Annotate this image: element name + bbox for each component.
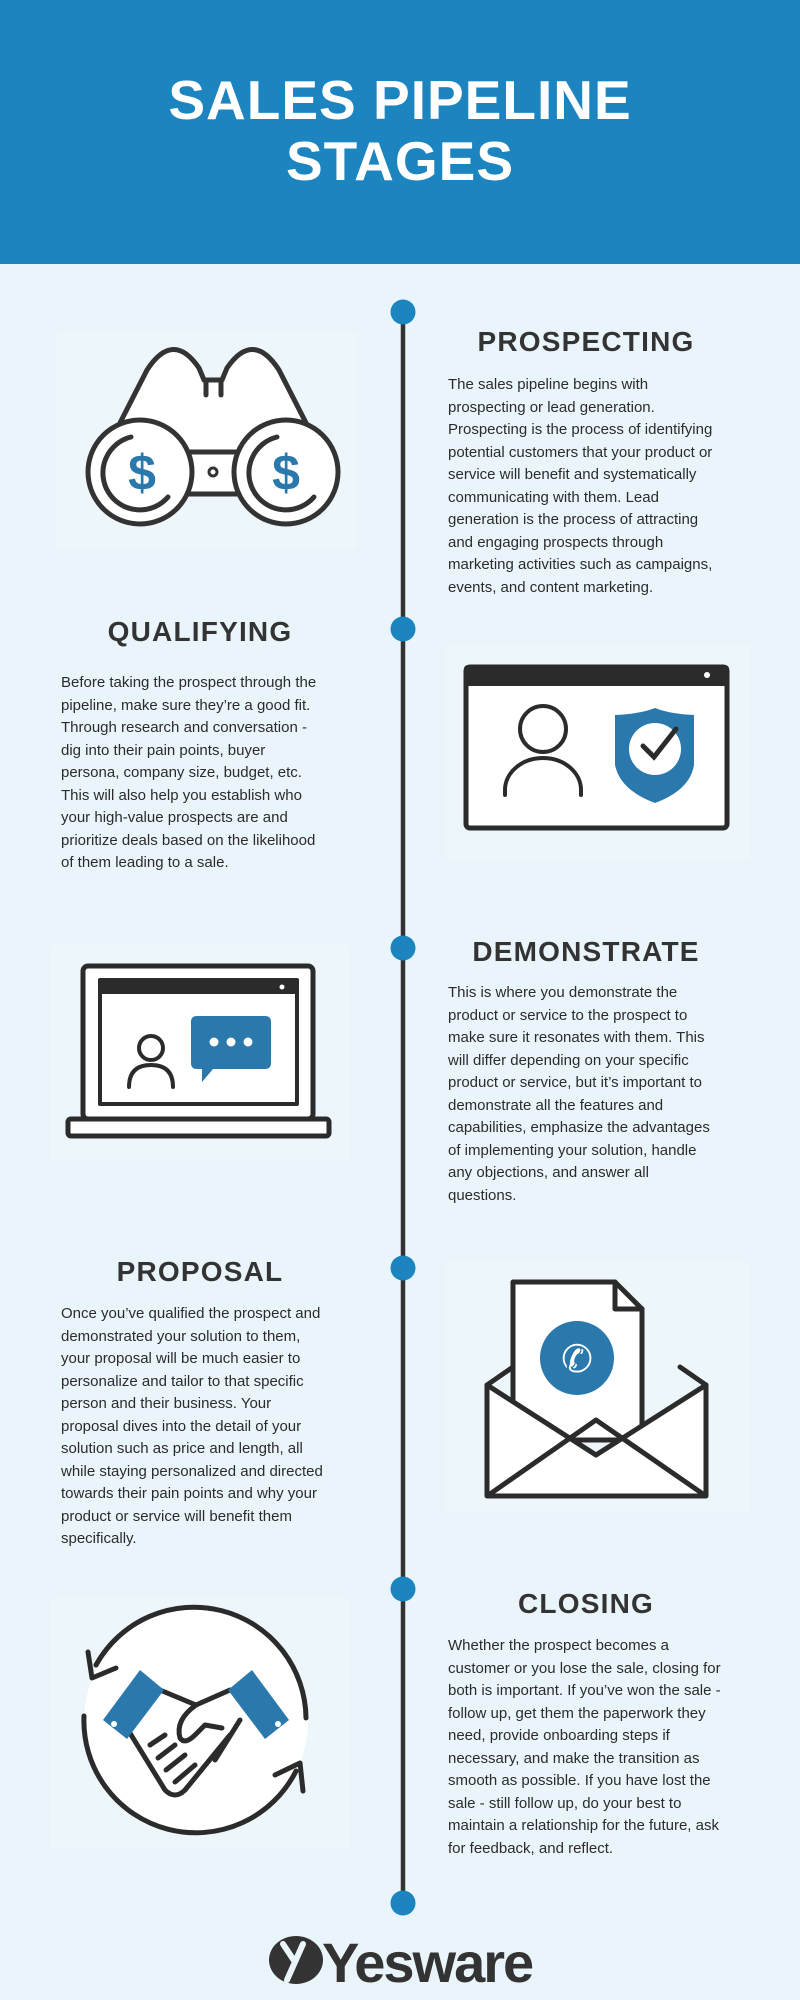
text: closing: for feedback, and reflect. bbox=[448, 1840, 613, 1856]
text: demonstrate: make sure it resonates with them. This bbox=[448, 1029, 704, 1046]
icon: binoculars: $ bbox=[128, 445, 156, 501]
text: qualifying: This will also help you establish who bbox=[61, 786, 302, 804]
text: proposal: while staying personalized and directed bbox=[61, 1462, 323, 1480]
text: demonstrate: any objections, and answer all bbox=[448, 1164, 649, 1181]
text: proposal: product or service will benefit them bbox=[61, 1508, 292, 1524]
text: proposal: towards their pain points and why your bbox=[61, 1485, 317, 1502]
text: qualifying: your high-value prospects are and bbox=[61, 809, 288, 826]
text: demonstrate: product or service, but it’s important to bbox=[448, 1074, 702, 1091]
text: demonstrate: questions. bbox=[448, 1186, 516, 1204]
text: closing: Whether the prospect becomes a bbox=[448, 1637, 669, 1654]
title: STAGES bbox=[286, 130, 514, 192]
text: prospecting: generation is the process of attracting bbox=[448, 511, 698, 528]
text: proposal: personalize and tailor to that specific bbox=[61, 1372, 304, 1390]
text: prospecting: events, and content marketing. bbox=[448, 578, 653, 596]
text: demonstrate: demonstrate all the features and bbox=[448, 1096, 663, 1114]
text: proposal: proposal dives into the detail of your bbox=[61, 1418, 301, 1434]
text: closing: both is important. If you’ve won the sale - bbox=[448, 1682, 721, 1699]
logo: Yesware: Yesware bbox=[322, 1931, 533, 1994]
text: qualifying: Through research and conversation - bbox=[61, 719, 307, 736]
heading: proposal: PROPOSAL bbox=[117, 1256, 283, 1287]
text: closing: smooth as possible. If you have lost the bbox=[448, 1772, 711, 1789]
text: prospecting: marketing activities such as campaigns, bbox=[448, 556, 712, 573]
text: prospecting: service will benefit and systematically bbox=[448, 466, 696, 483]
text: proposal: demonstrated your solution to them, bbox=[61, 1328, 300, 1344]
text: prospecting: communicating with them. Lead bbox=[448, 488, 659, 506]
text: prospecting: Prospecting is the process of identifying bbox=[448, 421, 712, 438]
header band bbox=[0, 0, 800, 264]
title: SALES PIPELINE bbox=[168, 69, 632, 131]
text: proposal: person and their business. Your bbox=[61, 1395, 271, 1412]
icon: binoculars: $ bbox=[272, 445, 300, 501]
text: demonstrate: will differ depending on your specific bbox=[448, 1052, 689, 1068]
text: qualifying: dig into their pain points, buyer bbox=[61, 742, 265, 758]
heading: closing: CLOSING bbox=[518, 1588, 654, 1619]
text: prospecting: potential customers that your product or bbox=[448, 444, 712, 460]
title bbox=[168, 69, 632, 192]
text: qualifying: of them leading to a sale. bbox=[61, 854, 229, 871]
text: prospecting bbox=[448, 376, 712, 596]
text: proposal: Once you’ve qualified the prospect and bbox=[61, 1305, 320, 1322]
text: closing: follow up, get them the paperwork they bbox=[448, 1704, 706, 1722]
text: proposal: your proposal will be much easier to bbox=[61, 1350, 300, 1367]
text: proposal bbox=[61, 1305, 323, 1547]
text: demonstrate bbox=[448, 984, 710, 1204]
text: proposal: specifically. bbox=[61, 1530, 137, 1547]
text: qualifying: persona, company size, budget, etc. bbox=[61, 764, 302, 781]
text: prospecting: prospecting or lead generation. bbox=[448, 398, 655, 416]
text: demonstrate: product or service to the prospect to bbox=[448, 1006, 687, 1024]
icon: envelope with phone letter: ✆ bbox=[561, 1337, 593, 1381]
text: closing: sale - still follow up, do your best to bbox=[448, 1794, 681, 1812]
text: closing: necessary, and make the transition as bbox=[448, 1750, 700, 1766]
text: closing: maintain a relationship for the future, ask bbox=[448, 1817, 719, 1834]
heading: demonstrate: DEMONSTRATE bbox=[472, 936, 700, 967]
text: qualifying: prioritize deals based on the likelihood bbox=[61, 832, 315, 848]
text: proposal: solution such as price and length, all bbox=[61, 1440, 303, 1457]
text: demonstrate: of implementing your solution, handle bbox=[448, 1142, 696, 1158]
text: qualifying: Before taking the prospect through the bbox=[61, 674, 316, 691]
text: closing: customer or you lose the sale, closing for bbox=[448, 1660, 721, 1676]
heading: qualifying: QUALIFYING bbox=[108, 616, 292, 647]
text: prospecting: and engaging prospects through bbox=[448, 534, 663, 550]
text: closing bbox=[448, 1637, 721, 1856]
text: qualifying bbox=[61, 674, 316, 871]
text: prospecting: The sales pipeline begins with bbox=[448, 376, 648, 393]
text: demonstrate: capabilities, emphasize the advantages bbox=[448, 1119, 710, 1136]
text: demonstrate: This is where you demonstrate the bbox=[448, 984, 677, 1001]
text: qualifying: pipeline, make sure they’re a good fit. bbox=[61, 696, 310, 714]
heading: prospecting: PROSPECTING bbox=[477, 326, 694, 357]
text: closing: need, provide onboarding steps if bbox=[448, 1727, 670, 1744]
